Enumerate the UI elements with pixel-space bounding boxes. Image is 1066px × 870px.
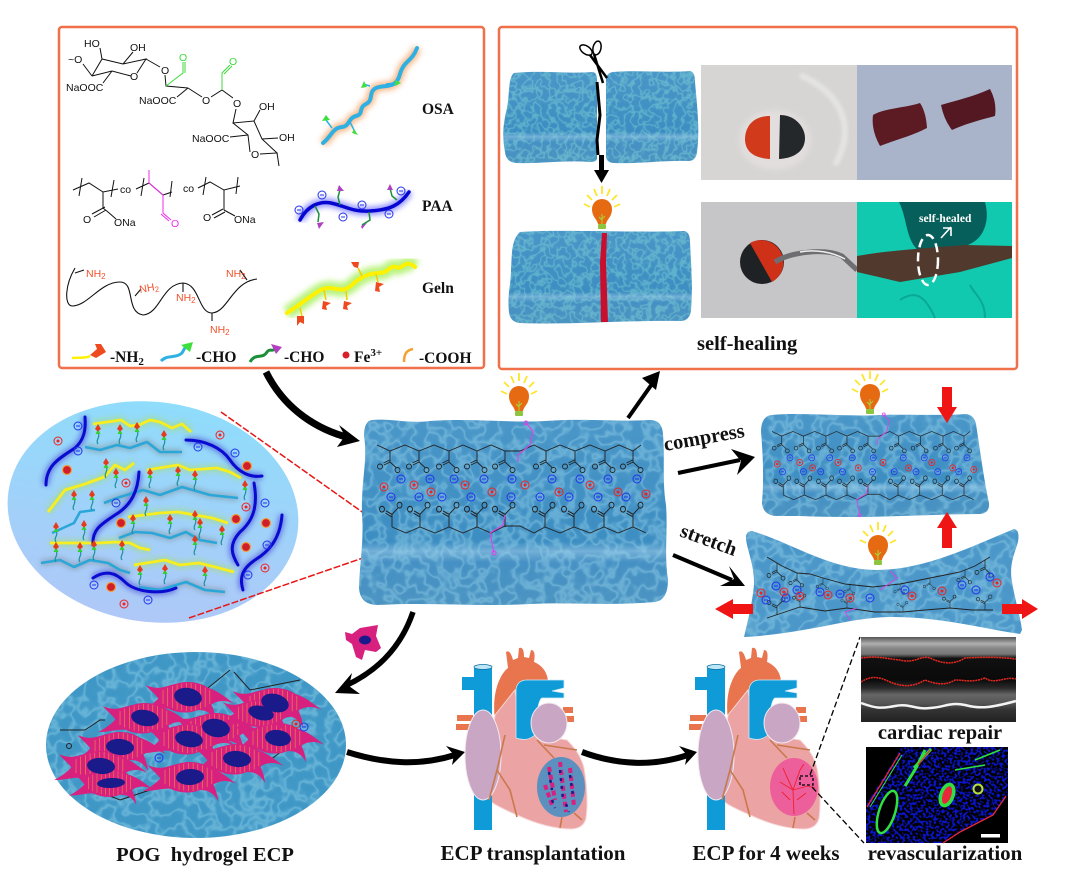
yellow Geln chains (48, 420, 241, 572)
PAA chemical structure: co (183, 183, 194, 195)
infarct zone with new vessels (770, 758, 818, 816)
hydrogel block right half (606, 71, 698, 163)
legend: -CHO (196, 349, 236, 366)
blue PAA chains (46, 417, 282, 592)
Geln chemical structure: NH (210, 324, 225, 336)
Geln chemical structure: NH (86, 268, 101, 280)
OSA chemical structure: O (251, 149, 259, 161)
teal OSA chains (41, 442, 238, 592)
cardiac cells (54, 682, 325, 805)
OSA chemical structure: O (161, 65, 169, 77)
OSA chemical structure: O (202, 95, 210, 107)
panel: molecular network oval (0, 383, 313, 641)
cut line (597, 82, 600, 155)
icon: bulb above compressed block (852, 371, 888, 414)
stretched molecular network (767, 557, 993, 620)
PAA chemical structure: ONa (234, 214, 256, 226)
zoom lines (189, 412, 391, 618)
Geln chemical structure: 2 (225, 328, 230, 337)
nuclei (86, 686, 292, 789)
OSA chemical structure: OH (130, 42, 146, 54)
chain glows (41, 417, 282, 592)
charges (54, 422, 271, 608)
ECP transplantation caption: ECP transplantation (441, 841, 626, 865)
self-healing caption: self-healing (697, 333, 798, 355)
ECP patch on heart (537, 757, 585, 817)
legend: -COOH (419, 350, 472, 367)
PAA chemical structure: O (171, 218, 179, 230)
OSA label: OSA (422, 101, 455, 118)
molecular network in block (377, 421, 650, 555)
heart after four weeks (689, 648, 820, 830)
icon: cardiomyocyte (345, 625, 381, 660)
photo: healed disc on tweezers (701, 202, 857, 318)
OSA chemical structure: HO (84, 38, 100, 50)
OSA chemical structure: O (229, 56, 237, 68)
OSA chemical structure: NaOOC (192, 133, 230, 145)
stretch label: stretch (677, 520, 740, 561)
arrow: hydrogel to cell-laden ECP (335, 612, 413, 694)
photo: cut cylinders (857, 65, 1012, 180)
PAA chemical structure: O (203, 212, 211, 224)
heart with ECP patch (456, 648, 587, 830)
Geln chemical structure: NH (226, 268, 241, 280)
compress label: compress (662, 420, 746, 456)
legend: -NH (110, 349, 138, 366)
Geln chemical structure: 2 (101, 272, 106, 281)
central hydrogel block (359, 420, 668, 605)
Geln chemical structure: NH (138, 282, 155, 296)
PAA chemical structure (73, 170, 256, 230)
dashed zoom box (800, 776, 813, 785)
healed seam (600, 233, 608, 322)
immunofluorescence image (866, 747, 1008, 843)
red arrow: stretch right (1002, 599, 1038, 619)
legend: Fe (354, 349, 370, 366)
zoom lines to images (810, 637, 864, 843)
legend: 3+ (370, 347, 382, 359)
red arrow: compress down (937, 387, 957, 423)
POG hydrogel ECP caption: POG hydrogel ECP (116, 844, 294, 866)
OSA chemical structure: OH (279, 132, 295, 144)
cardiac repair caption: cardiac repair (878, 722, 1002, 744)
panel: self-healing (499, 27, 1017, 369)
OSA chemical structure: O (233, 98, 241, 110)
icon: bulb above block (501, 373, 537, 416)
red arrow: stretch left (715, 599, 753, 619)
PAA chemical structure: O (83, 214, 91, 226)
legend: -CHO (284, 349, 324, 366)
OSA chemical structure: OH (259, 101, 275, 113)
Geln chemical structure: 2 (241, 272, 246, 281)
OSA chemical structure: O (179, 52, 187, 64)
OSA chemical structure: NaOOC (139, 95, 177, 107)
photo: cut discs (701, 65, 857, 180)
compressed hydrogel block (761, 413, 989, 517)
Geln chemical structure: 2 (191, 296, 196, 305)
Geln chemical structure (67, 268, 257, 337)
stretched hydrogel block (744, 529, 1022, 637)
legend: 2 (138, 356, 144, 368)
icon: scissors (578, 40, 607, 83)
PAA polymer icon (295, 184, 409, 229)
iron ions (62, 462, 270, 592)
revascularization caption: revascularization (868, 841, 1023, 865)
OSA chemical structure: O (130, 71, 138, 83)
OSA chemical structure: ~O (68, 54, 82, 66)
healed hydrogel block (508, 231, 692, 323)
panel: POG hydrogel ECP oval (46, 652, 346, 838)
M-mode echocardiogram (861, 637, 1016, 722)
arrow: ECP to heart (347, 746, 465, 765)
photo: healed strip in gloved hand (857, 202, 1012, 318)
arrow: to self-healing (628, 371, 660, 418)
arrow: components to hydrogel (266, 372, 360, 447)
OSA chemical structure: NaOOC (66, 82, 104, 94)
arrow: transplantation to four weeks (582, 746, 697, 765)
molecular scaffold (60, 670, 312, 800)
PAA chemical structure: ONa (114, 217, 136, 229)
red arrow: compress up (937, 512, 957, 548)
Geln polymer icon (287, 262, 415, 326)
PAA label: PAA (422, 198, 454, 215)
photo: healed strip in gloved hand: self-healed (919, 213, 972, 225)
hydrogel block left half (503, 72, 597, 163)
arrow: cut to healed (594, 155, 609, 183)
OSA chemical structure (66, 38, 295, 166)
PAA chemical structure: co (120, 184, 131, 196)
side chains (53, 422, 248, 586)
Geln label: Geln (422, 280, 454, 297)
Geln chemical structure: 2 (154, 285, 161, 294)
OSA polymer icon (322, 48, 417, 143)
Geln chemical structure: NH (176, 292, 191, 304)
icon: bulb above stretched block (860, 522, 896, 565)
ECP for 4 weeks caption: ECP for 4 weeks (692, 841, 840, 865)
arrow: stretch (673, 555, 745, 586)
legend (72, 342, 472, 368)
panel: polymer components (59, 27, 484, 368)
icon: bulb (584, 186, 620, 229)
arrow: compress (678, 449, 755, 475)
